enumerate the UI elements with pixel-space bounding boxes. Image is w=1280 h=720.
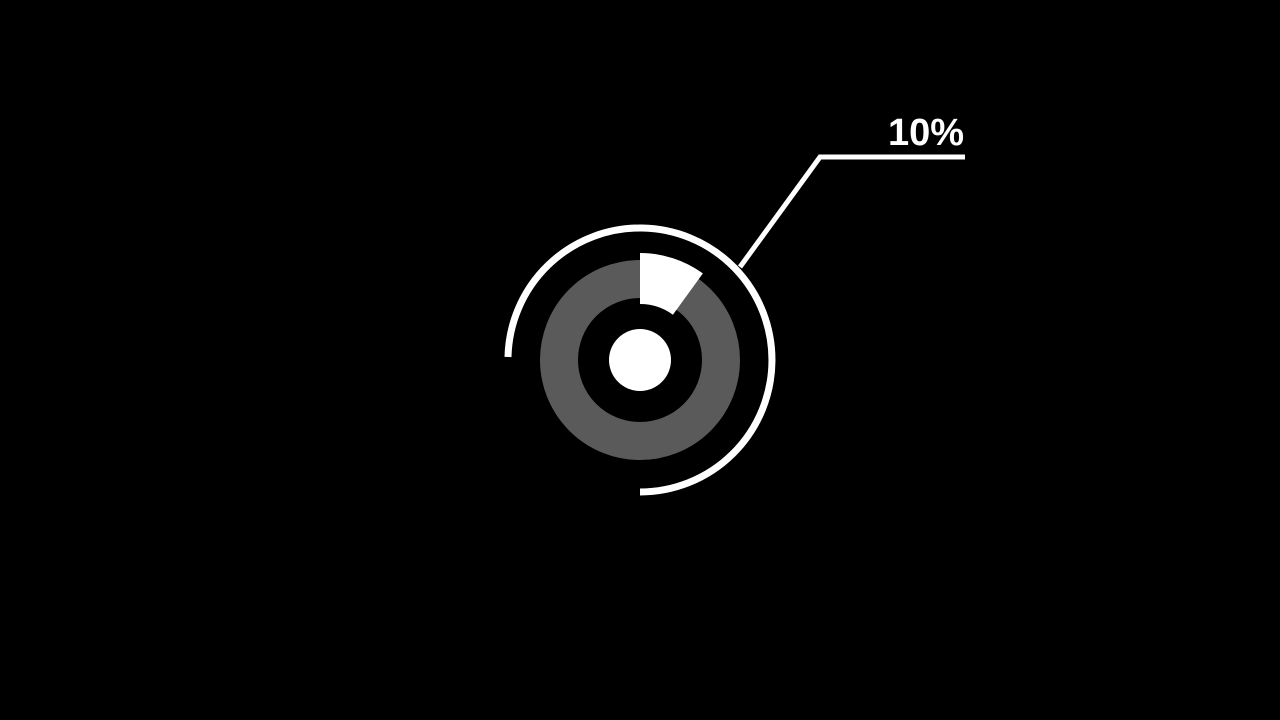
center dot	[609, 329, 671, 391]
donut chart	[508, 228, 772, 492]
leader line	[740, 157, 965, 267]
white slice 10%	[640, 253, 703, 315]
gray ring	[559, 279, 721, 441]
label: 10%: 10%	[888, 112, 964, 154]
outer arc ring	[508, 228, 772, 492]
